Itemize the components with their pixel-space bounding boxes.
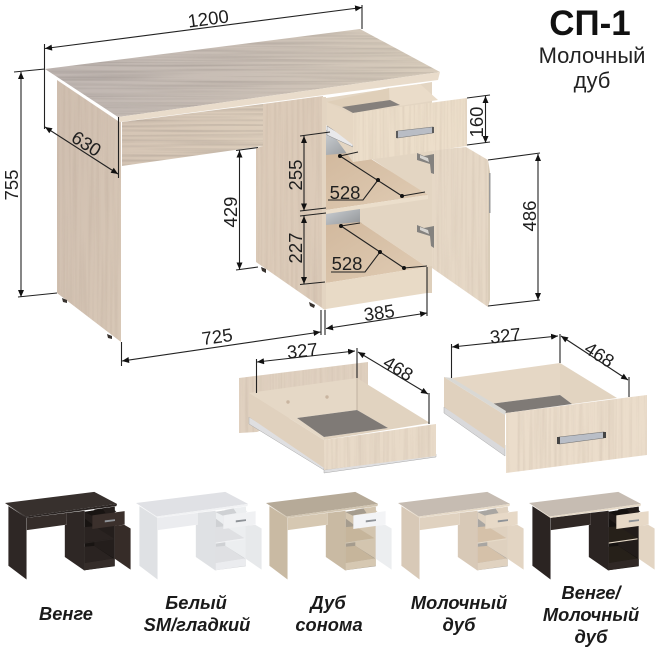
main desk illustration [45, 29, 490, 342]
dimension: rear drawer 468: 468 [380, 351, 417, 385]
dimension: 255: 255 [285, 160, 306, 190]
box inner side [324, 378, 430, 440]
door handle edge [489, 173, 490, 213]
pedestal inner wall [358, 146, 432, 268]
label: Белый SM/гладкий: Белый [165, 592, 227, 613]
drawer slide rail [327, 126, 353, 147]
thumbnail: Белый [136, 492, 262, 579]
handle [557, 432, 606, 444]
rim [444, 377, 506, 415]
box inner back [249, 378, 357, 440]
label: Белый SM/гладкий: SM/гладкий [144, 614, 250, 635]
pedestal plinth [326, 267, 427, 309]
subtitle: дуб [574, 68, 610, 93]
dimension: depth 630 [45, 117, 118, 178]
dimension: 725 [122, 310, 325, 366]
desktop front edge [118, 72, 440, 122]
floor [490, 395, 572, 413]
inner back [452, 363, 560, 415]
dimension: 429: 429 [220, 197, 241, 227]
dimension: 227 [285, 213, 326, 284]
pedestal side panel [256, 96, 325, 310]
dimension: 725: 725 [200, 324, 234, 349]
dimension: front drawer 468 [561, 336, 629, 397]
dimension: 227: 227 [285, 233, 306, 263]
label: Дуб сонома [295, 592, 363, 635]
dimension: front drawer 327: 327 [489, 323, 522, 348]
slide rail [444, 407, 505, 456]
inner side [506, 363, 617, 413]
dimension: lower shelf 528: 528 [332, 253, 362, 274]
title: СП-1 [549, 4, 631, 43]
label: Молочный дуб: дуб [442, 614, 476, 635]
dimension: 429 [220, 148, 258, 270]
dimension: upper shelf 528: 528 [330, 182, 360, 203]
dimension: upper shelf 528 [328, 152, 425, 203]
rear board [239, 362, 368, 433]
dimension: rear drawer 468 [358, 351, 429, 424]
label: Белый SM/гладкий [144, 592, 250, 635]
dimension: height 755 [1, 69, 57, 297]
dimension: depth 630: 630 [68, 126, 105, 161]
door [432, 147, 488, 307]
dimension: 255 [285, 132, 330, 211]
drawer handle [396, 127, 434, 138]
modesty panel [122, 104, 263, 166]
dimension: front drawer 327 [452, 323, 560, 378]
dimension: front drawer 468: 468 [581, 337, 618, 372]
label: Венге/Молочный дуб: дуб [574, 626, 608, 647]
label: Молочный дуб [411, 592, 507, 635]
dimension: rear drawer 327: 327 [286, 338, 319, 363]
desktop top surface [45, 29, 440, 117]
box end panel [324, 424, 436, 470]
outer side [444, 377, 505, 449]
dimension: 486 [488, 153, 540, 306]
thumbnail: Венге/Молочный дуб [529, 492, 655, 579]
shelf edge [326, 195, 428, 214]
box floor [297, 410, 388, 437]
label: Молочный дуб: Молочный [411, 592, 507, 613]
dimension: lower shelf 528 [331, 223, 427, 274]
box side [249, 393, 324, 468]
slide rail [249, 417, 436, 473]
dimension: 160: 160 [466, 107, 487, 137]
dimension: 385 [326, 267, 427, 328]
mounting holes [286, 395, 329, 404]
thumbnail: Молочный дуб [398, 492, 524, 579]
label: Дуб сонома: Дуб [308, 592, 346, 613]
desk feet [62, 267, 315, 339]
label: Венге/Молочный дуб: Молочный [543, 604, 639, 625]
drawer front view [444, 363, 647, 473]
subtitle [539, 43, 645, 93]
dimension: rear drawer 327 [256, 338, 357, 410]
pedestal interior back [326, 130, 362, 156]
front panel [506, 395, 647, 473]
label: Венге/Молочный дуб [543, 582, 639, 647]
desk left leg [57, 80, 121, 342]
dimension: height 755: 755 [1, 170, 22, 200]
upper compartment floor [326, 152, 428, 210]
dimension: 160 [466, 95, 490, 145]
drawer side [327, 102, 353, 145]
dimension: 486: 486 [519, 201, 540, 231]
dimension: 385: 385 [362, 300, 396, 325]
drawer front [353, 98, 467, 162]
label: Венге/Молочный дуб: Венге/ [562, 582, 622, 603]
thumbnail: Венге [5, 492, 131, 579]
drawer rear view [239, 362, 436, 473]
label: Венге: Венге [39, 603, 93, 624]
upper hinge [417, 153, 434, 174]
pedestal front stile [322, 97, 326, 310]
lower compartment floor [326, 222, 427, 283]
thumbnail: Дуб сонома [266, 492, 392, 579]
label: Дуб сонома: сонома [295, 614, 363, 635]
lower hinge [417, 225, 434, 248]
subtitle: Молочный [539, 43, 645, 68]
dimension: width 1200 [44, 5, 362, 129]
dimension: width 1200: 1200 [186, 5, 230, 32]
drawer interior [326, 82, 438, 162]
